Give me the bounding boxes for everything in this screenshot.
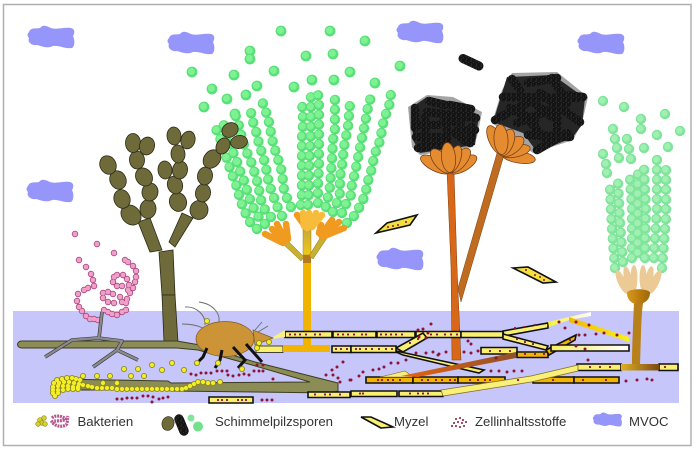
legend: Myzel: Myzel: [394, 414, 429, 429]
pale green spore fungus: [602, 100, 680, 366]
hyphae: myzel bars: [209, 312, 678, 403]
legend: myzel icon: [361, 417, 393, 428]
bacteria: [75, 234, 136, 320]
stem: [632, 298, 644, 366]
stem: [458, 153, 504, 302]
legend: spores icon: [160, 414, 203, 432]
olive spore fungus: [97, 120, 248, 342]
black spore fungus right: [458, 72, 588, 302]
spores: [117, 201, 145, 229]
green fungus stem: [303, 258, 311, 350]
legend: bacteria icon: [36, 416, 68, 426]
green spore fungus: [191, 30, 400, 350]
mite: [182, 302, 273, 368]
ground hyphae: olive: [18, 341, 338, 393]
MVOC clouds: [26, 21, 624, 270]
yellow bacteria: [53, 321, 269, 396]
gray hyphae: [45, 312, 138, 367]
legend: Schimmelpilzsporen: Schimmelpilzsporen: [215, 414, 333, 429]
panel: substrate: [13, 311, 679, 403]
vesicle: [483, 123, 536, 166]
legend: MVOC icon: [593, 413, 622, 426]
cell contents inside hyphae: [218, 325, 665, 400]
black spore fungus left: [408, 95, 482, 360]
orange branch: [401, 352, 516, 377]
floating myzel right: [513, 267, 556, 283]
hairs: [182, 302, 268, 337]
vesicle: [418, 142, 480, 178]
cell contents: red dots: [117, 322, 652, 402]
legend: Bakterien: Bakterien: [78, 414, 133, 429]
stem: [159, 250, 175, 295]
phialides: [265, 213, 344, 243]
legend: MVOC: MVOC: [629, 414, 669, 429]
phialides: [613, 265, 664, 295]
floating black spore: [463, 58, 479, 66]
body: [196, 322, 254, 356]
stem: [447, 172, 461, 360]
vesicle: [627, 289, 650, 304]
legend: Zellinhaltsstoffe: Zellinhaltsstoffe: [475, 414, 566, 429]
floating myzel left: [376, 215, 417, 233]
legs: [195, 344, 262, 368]
legend: [36, 413, 669, 432]
legend: red dots icon: [452, 418, 466, 427]
